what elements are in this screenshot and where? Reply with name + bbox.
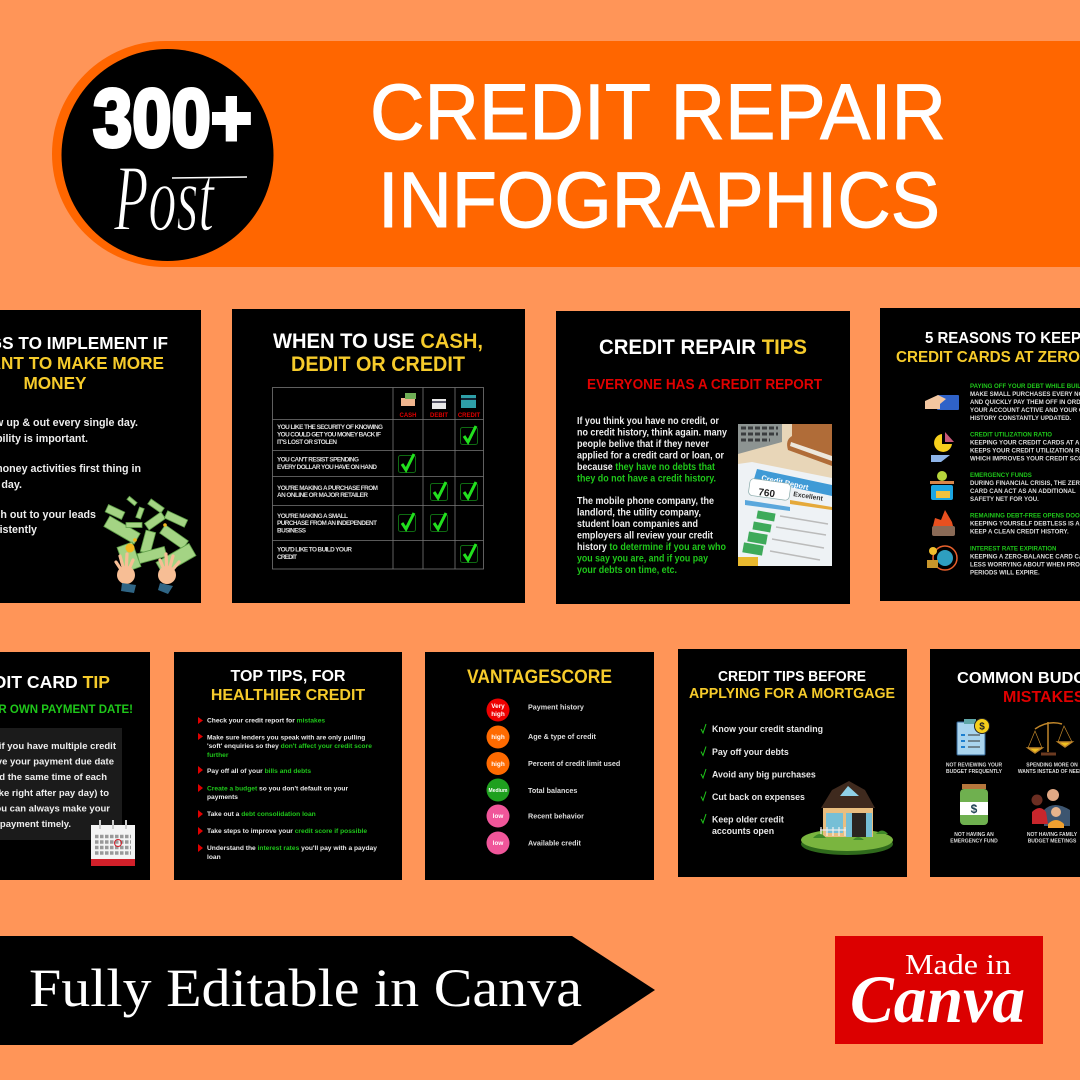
bullet list: payments — [207, 794, 238, 801]
score factors: Available credit — [528, 838, 581, 848]
mistake label — [1027, 832, 1078, 844]
score factors: high — [491, 734, 505, 741]
body text: If you think you have no credit, or — [577, 416, 719, 427]
editable banner arrow — [0, 936, 655, 1045]
table row labels: CREDIT — [277, 554, 297, 561]
icon: burning card — [932, 510, 955, 536]
badge: made in canva: Made in — [905, 949, 1012, 981]
icon: card in hand — [925, 395, 959, 410]
badge: 300+ Post — [62, 49, 274, 261]
reason list: CARD CAN ACT AS AN ADDITIONAL — [970, 488, 1076, 495]
reason list: EMERGENCY FUNDS — [970, 472, 1032, 479]
table check marks — [398, 426, 478, 562]
panel heading — [689, 668, 895, 702]
checklist: Keep older credit — [712, 814, 784, 824]
panel heading: APPLYING FOR A MORTGAGE — [689, 685, 895, 702]
table row labels: IT'S LOST OR STOLEN — [277, 439, 337, 446]
panel: 5 reasons to keep credit cards at zero — [880, 308, 1080, 601]
table row labels: YOU CAN'T RESIST SPENDING — [277, 456, 359, 464]
body text: your debts on time, etc. — [577, 565, 677, 576]
score factors: Recent behavior — [528, 812, 584, 820]
panel: when to use cash, debit or credit — [232, 309, 525, 603]
icon: house — [801, 781, 893, 855]
panel: things to implement — [0, 310, 201, 603]
table row labels: EVERY DOLLAR YOU HAVE ON HAND — [277, 464, 377, 471]
reason list: SAFETY NET FOR YOU. — [970, 496, 1039, 503]
checklist: Pay off your debts — [712, 747, 789, 757]
bullet list: Take steps to improve your credit score if possible — [207, 828, 367, 835]
body text: you say you are, and if you pay — [577, 554, 708, 564]
icon: family — [1032, 789, 1070, 828]
panel heading: HEALTHIER CREDIT — [211, 687, 365, 704]
table row labels: YOU LIKE THE SECURITY OF KNOWING — [277, 424, 383, 431]
icon: money jar — [960, 784, 988, 825]
badge: made in canva: Canva — [850, 961, 1025, 1037]
badge: 300+ Post: Post — [113, 147, 215, 251]
mistake label: NOT REVIEWING YOUR — [946, 762, 1003, 768]
subheading: EVERYONE HAS A CREDIT REPORT — [587, 377, 822, 393]
reason list: CREDIT UTILIZATION RATIO — [970, 432, 1052, 438]
score factors: low — [493, 840, 503, 847]
table row labels: YOU'RE MAKING A PURCHASE FROM — [277, 485, 378, 492]
body text — [0, 417, 141, 536]
icon: budget clipboard: $ — [979, 722, 985, 732]
bullet list: Check your credit report for mistakes — [207, 718, 325, 724]
title: CREDIT REPAIR — [370, 67, 946, 156]
bullet list: 'soft' enquiries so they don't affect your credit score — [207, 743, 372, 750]
photo: credit report: Excellent — [793, 491, 824, 503]
comparison table — [272, 388, 484, 569]
mistake label: BUDGET FREQUENTLY — [946, 769, 1003, 775]
score factors: Age & type of credit — [528, 732, 596, 741]
panel: credit tips before mortgage — [678, 649, 907, 877]
table header icons — [399, 393, 480, 419]
reason list: HISTORY CONSTANTLY UPDATED. — [970, 415, 1072, 422]
panel heading: VANTAGESCORE — [467, 667, 612, 688]
score factors: Total balances — [528, 786, 577, 795]
photo: credit report: 760 — [758, 487, 776, 500]
icon: budget clipboard — [957, 718, 990, 755]
mistake label — [1018, 762, 1080, 775]
checklist: Cut back on expenses — [712, 792, 805, 802]
checklist: Avoid any big purchases — [712, 770, 816, 780]
body text: history to determine if you are who — [577, 542, 726, 553]
badge: made in canva — [835, 936, 1043, 1044]
icon: interest rate — [927, 546, 957, 570]
body text: landlord, the utility company, — [577, 508, 701, 518]
mistake label: BUDGET MEETINGS — [1028, 838, 1077, 844]
icon: emergency jar — [930, 471, 954, 500]
bullet list: Pay off all of your bills and debts — [207, 768, 311, 775]
body text: employers all review your credit — [577, 530, 714, 542]
body text: because they have no debts that — [577, 462, 716, 473]
panel heading: DEDIT OR CREDIT — [291, 352, 465, 376]
score factors: low — [493, 813, 503, 820]
panel heading — [0, 333, 168, 393]
panel heading: CREDIT REPAIR TIPS — [599, 335, 807, 359]
body text: The mobile phone company, the — [577, 496, 714, 507]
table row labels: BUSINESS — [277, 528, 307, 534]
table row labels: YOU'D LIKE TO BUILD YOUR — [277, 546, 352, 554]
panel heading: TOP TIPS, FOR — [231, 668, 346, 685]
photo: credit report: Credit Report — [761, 473, 810, 492]
panel heading — [211, 668, 365, 704]
panel heading: CREDIT TIPS BEFORE — [718, 668, 866, 685]
body text: they do not have a credit history. — [577, 474, 716, 484]
reason list: KEEP A CLEAN CREDIT HISTORY. — [970, 528, 1069, 536]
mistake label: NOT HAVING AN — [954, 832, 994, 838]
panel: common budget mistakes — [930, 649, 1080, 877]
table header icons: DEBIT — [430, 413, 448, 419]
photo: credit report — [738, 424, 832, 566]
bullet list: Make sure lenders you speak with are only pulling — [207, 734, 365, 742]
body text: applied for a credit card or loan, or — [577, 450, 724, 462]
bullet list: Take out a debt consolidation loan — [207, 811, 316, 818]
checklist — [701, 724, 823, 836]
table row labels: YOU COULD GET YOU MONEY BACK IF — [277, 432, 381, 438]
score factors: Very — [491, 703, 505, 710]
body text: student loan companies and — [577, 519, 698, 530]
title: INFOGRAPHICS — [378, 155, 940, 244]
table row labels: YOU'RE MAKING A SMALL — [277, 513, 348, 520]
checklist: Know your credit standing — [712, 724, 823, 734]
icon: pie chart — [931, 432, 954, 462]
bullet list: loan — [207, 854, 221, 861]
icon: calendar — [91, 820, 135, 866]
header banner — [52, 41, 1080, 267]
bullet list — [198, 717, 377, 861]
mistake label: NOT HAVING FAMILY — [1027, 832, 1078, 838]
panel: vantagescore — [425, 652, 654, 880]
bullet list: Create a budget so you don't default on your — [207, 786, 348, 792]
icon: scales — [1028, 722, 1072, 754]
table row labels — [277, 424, 383, 561]
reason list: PERIODS WILL EXPIRE. — [970, 570, 1040, 576]
mistake label — [946, 762, 1003, 775]
score factors: high — [491, 711, 505, 718]
table row labels: AN ONLINE OR MAJOR RETAILER — [277, 492, 368, 499]
panel heading: WHEN TO USE CASH, — [273, 329, 483, 353]
score factors: Percent of credit limit used — [528, 759, 620, 768]
badge: 300+ Post: 300+ — [93, 73, 252, 164]
panel: credit card tip — [0, 652, 150, 880]
table header icons: CREDIT — [458, 413, 480, 419]
body text: people belive that if they never — [577, 439, 709, 450]
panel heading — [896, 330, 1080, 366]
table row labels: PURCHASE FROM AN INDEPENDENT — [277, 520, 377, 527]
score factors: high — [491, 761, 505, 768]
panel: top tips for healthier credit — [174, 652, 402, 880]
bullet list: further — [207, 752, 229, 759]
reason list — [970, 383, 1080, 576]
score factors: Medium — [489, 788, 508, 794]
body text: no credit history, think again. many — [577, 428, 727, 438]
panel: credit repair tips — [556, 311, 850, 604]
title — [370, 67, 946, 244]
bullet list: Understand the interest rates you'll pay with a payday — [207, 845, 377, 852]
editable banner arrow: Fully Editable in Canva — [29, 958, 582, 1018]
body text — [577, 416, 727, 576]
mistake label: SPENDING MORE ON — [1026, 762, 1078, 768]
reason list: INTEREST RATE EXPIRATION — [970, 546, 1056, 552]
checklist: accounts open — [712, 826, 774, 836]
icon: money jar: $ — [971, 802, 978, 816]
mistake label — [950, 832, 998, 844]
panel heading: MONEY — [23, 373, 87, 393]
score factors: Payment history — [528, 702, 584, 712]
panel heading — [273, 329, 483, 376]
mistake label: EMERGENCY FUND — [950, 838, 998, 844]
tip box — [0, 728, 122, 840]
table header icons: CASH — [399, 413, 417, 419]
score factors — [486, 698, 620, 854]
icon: falling money and hands — [104, 496, 196, 594]
panel heading — [957, 670, 1080, 706]
